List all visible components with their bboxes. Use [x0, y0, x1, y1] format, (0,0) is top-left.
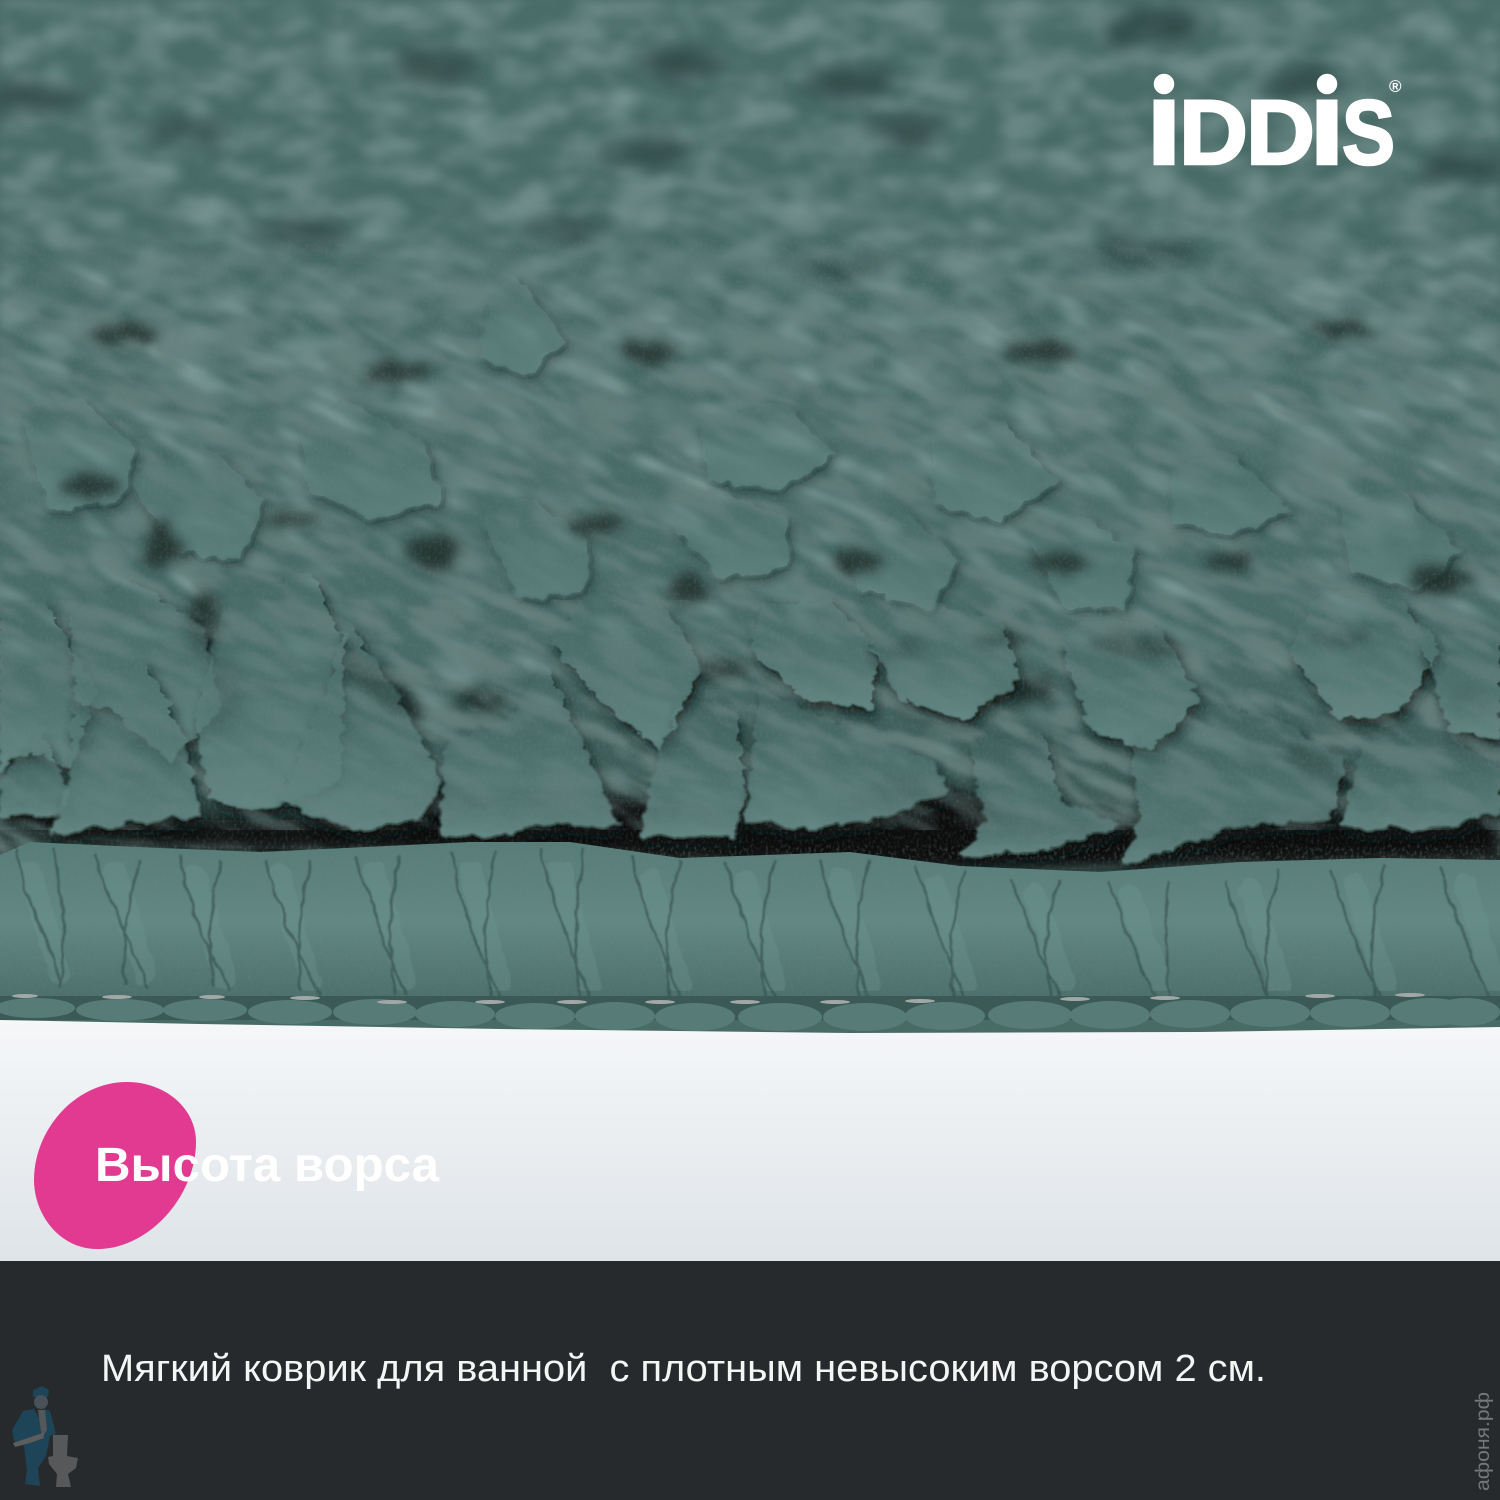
dark pockets between clumps: [60, 321, 1498, 803]
IDDIS logo: I: [1147, 82, 1181, 184]
heading: Высота ворса: [95, 1139, 439, 1192]
description text: Мягкий коврик для ванной с плотным невысоким ворсом 2 см.: [101, 1348, 1266, 1390]
pink blob: [34, 1082, 196, 1249]
white floor strip: [0, 1020, 1500, 1262]
mid pile clumps: [20, 270, 1460, 610]
IDDIS logo: ®: [1389, 77, 1402, 96]
IDDIS logo: [1147, 75, 1402, 184]
dark pockets in the far pile: [0, 12, 1500, 282]
braided edge: [0, 842, 1500, 1002]
IDDIS logo: D: [1246, 82, 1315, 184]
mid pile ridges: [0, 170, 1500, 860]
icon: plumber with toilet: [12, 1386, 78, 1487]
stitched bottom edge: [0, 993, 1500, 1031]
IDDIS logo: D: [1179, 82, 1248, 184]
IDDIS logo: I: [1310, 82, 1344, 184]
pile fibres: [0, 240, 1500, 860]
ridges over near pile: [0, 600, 1500, 830]
soft blurred far pile: [0, 0, 1500, 496]
dark gaps behind the near pile: [0, 780, 1500, 872]
near pile tufts: [0, 570, 1500, 866]
watermark: афоня.рф: [1473, 1392, 1494, 1491]
dark footer panel: [0, 1261, 1500, 1500]
IDDIS logo: S: [1342, 82, 1395, 184]
rug photograph: [0, 0, 1500, 1040]
